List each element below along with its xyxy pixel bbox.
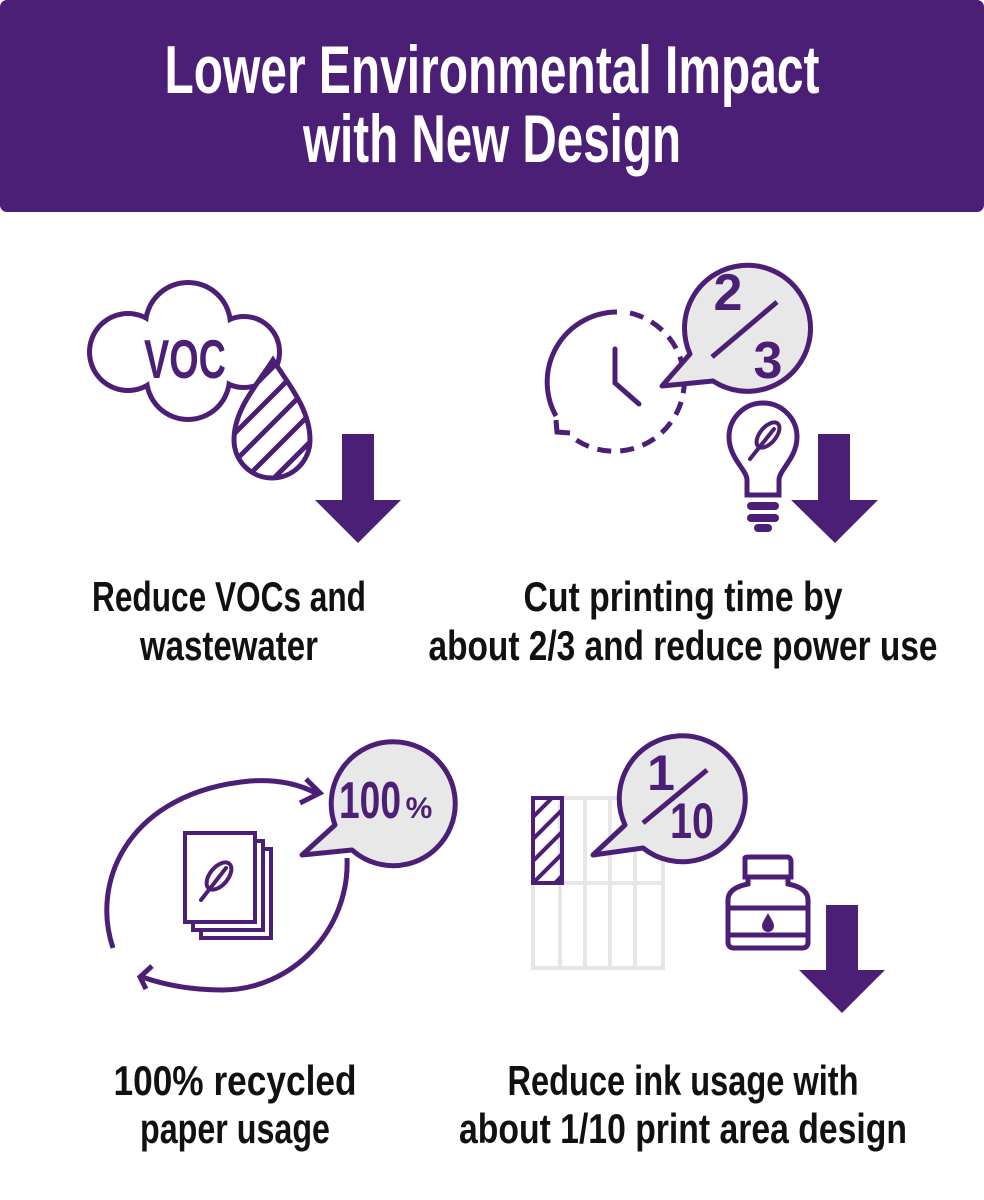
icon: VOC cloud	[92, 285, 277, 417]
text: reduce ink: Reduce ink usage with	[508, 1057, 858, 1104]
callout: 1/10	[593, 736, 745, 862]
panel: ink usage	[459, 736, 907, 1152]
icon: clock	[547, 312, 684, 451]
title: with New Design	[302, 101, 681, 177]
text: cut printing time	[428, 573, 938, 669]
callout: 2/3: 3	[754, 332, 782, 390]
callout: 2/3	[662, 264, 811, 391]
icon: paper stack	[185, 833, 271, 938]
icon: hatched drop	[232, 356, 312, 480]
title	[164, 32, 820, 177]
icon: print grid	[531, 796, 665, 970]
panel: recycled paper	[107, 742, 455, 1152]
text: recycled paper: 100% recycled	[114, 1057, 356, 1104]
icon: recycle loop arrows	[107, 779, 347, 990]
icon: ink bottle	[728, 857, 808, 948]
icon: light bulb	[729, 403, 797, 528]
callout: 100%: %	[406, 792, 432, 825]
text: Reduce VOCs: Reduce VOCs and	[92, 573, 366, 620]
callout: 2/3: 2	[714, 264, 742, 322]
callout: 1/10: 1	[647, 745, 675, 801]
header banner	[0, 0, 984, 212]
text: recycled paper: paper usage	[140, 1105, 330, 1152]
arrow: down	[791, 434, 878, 543]
icon: VOC cloud: VOC	[144, 328, 226, 390]
text: reduce ink	[459, 1057, 907, 1152]
callout: 1/10: 10	[670, 793, 714, 849]
callout: 100%	[302, 742, 455, 866]
arrow: down	[799, 905, 885, 1013]
panel: printing time	[428, 264, 938, 669]
text: recycled paper	[114, 1057, 356, 1152]
text: Reduce VOCs: wastewater	[139, 622, 318, 669]
panel: VOC	[92, 285, 401, 669]
arrow: down	[315, 434, 401, 543]
text: Reduce VOCs	[92, 573, 366, 669]
text: cut printing time: Cut printing time by	[524, 573, 843, 620]
callout: 100%: 100	[339, 772, 401, 830]
